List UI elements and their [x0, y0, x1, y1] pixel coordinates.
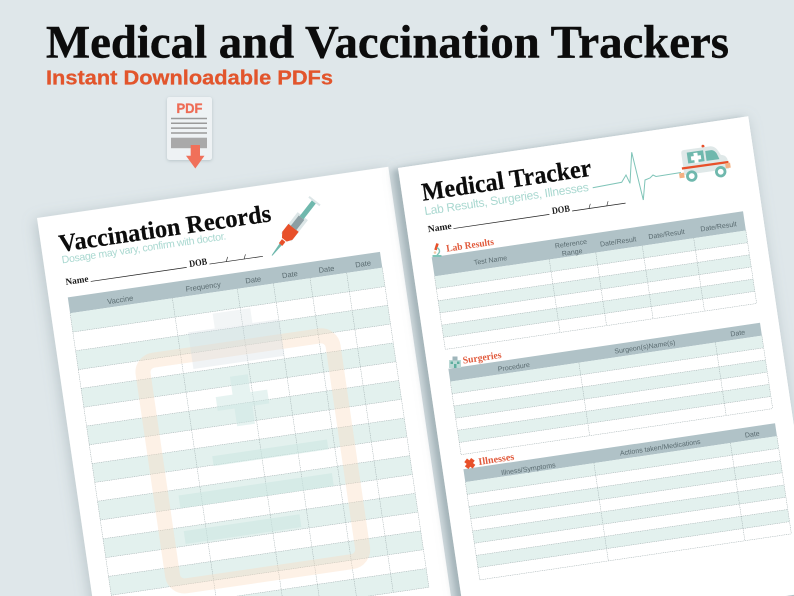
- table: lab results: [432, 211, 757, 349]
- note: dosage: Dosage may vary, confirm with doctor.: [61, 230, 227, 266]
- name and date of birth line: Name: [65, 275, 89, 288]
- panel: medical tracker page: [398, 116, 794, 596]
- icon: PDF download: PDF: [176, 100, 203, 116]
- panel: vaccination records page: [37, 167, 458, 596]
- table: lab results: Test Name: [474, 255, 508, 267]
- icon: hospital: [449, 356, 461, 368]
- heading: medical tracker: Medical Tracker: [420, 153, 593, 207]
- table: illnesses: [463, 423, 791, 580]
- icon: PDF download: [167, 97, 212, 168]
- table: vaccine log: Date: [281, 269, 298, 280]
- table: vaccine log: Date: [355, 258, 372, 270]
- table: illnesses: Actions taken/Medications: [620, 439, 701, 458]
- table: surgeries: [448, 323, 773, 455]
- table: surgeries: Surgeon(s)Name(s): [614, 340, 676, 356]
- label: illnesses: Illnesses: [478, 452, 515, 468]
- heading: vaccination records: Vaccination Records: [57, 200, 273, 258]
- table: surgeries: Date: [730, 329, 746, 338]
- subheading: tracker contents: Lab Results, Surgeries, Illnesses: [423, 180, 590, 218]
- name and date of birth line: DOB: [551, 204, 571, 217]
- table: vaccine log: [68, 252, 429, 596]
- title: Medical and Vaccination Trackers: [46, 16, 729, 68]
- table: lab results: Date/Result: [648, 229, 685, 241]
- icon: microscope: [432, 244, 442, 256]
- icon: syringe: [266, 196, 321, 260]
- table: vaccine log: Frequency: [185, 280, 222, 294]
- name and date of birth line: Name: [427, 222, 452, 235]
- name and date of birth line: [427, 196, 626, 235]
- label: lab results: Lab Results: [446, 237, 495, 255]
- table: vaccine log: Vaccine: [107, 294, 134, 306]
- subtitle: Instant Downloadable PDFs: [46, 66, 333, 90]
- heartbeat line: [593, 152, 681, 200]
- name and date of birth line: [65, 249, 263, 288]
- table: lab results: Date/Result: [600, 236, 637, 249]
- table: vaccine log: Date: [245, 274, 262, 286]
- table: lab results: Reference: [555, 239, 588, 250]
- table: surgeries: Procedure: [497, 362, 531, 374]
- table: lab results: Date/Result: [700, 221, 737, 233]
- table: vaccine log: Date: [318, 264, 335, 275]
- watermark: clipboard: [136, 297, 364, 588]
- label: surgeries: Surgeries: [462, 350, 502, 367]
- name and date of birth line: DOB: [189, 257, 208, 270]
- icon: red cross mark: [466, 459, 474, 468]
- table: lab results: Range: [562, 248, 583, 258]
- table: illnesses: Illness/Symptoms: [501, 462, 557, 477]
- icon: ambulance: [676, 141, 732, 182]
- table: illnesses: Date: [744, 431, 760, 440]
